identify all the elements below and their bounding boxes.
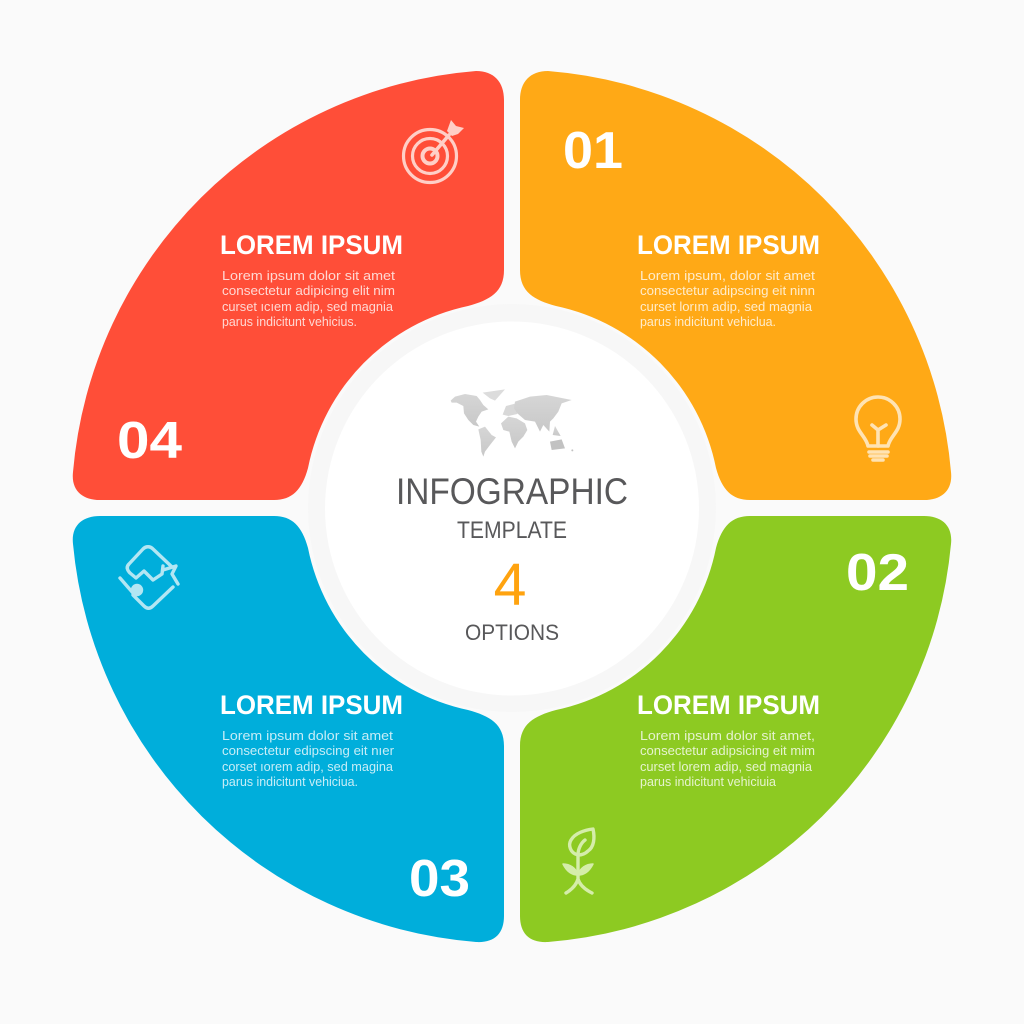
- heading: LOREM IPSUM: [637, 690, 820, 720]
- body text: parus indicitunt vehiciuia: [640, 774, 777, 789]
- heading: LOREM IPSUM: [220, 690, 403, 720]
- panel: 03 blue: [73, 516, 504, 942]
- body text: Lorem ipsum dolor sit amet: [222, 728, 393, 743]
- number 02: 02: [846, 544, 909, 602]
- body text: curset lorım adip, sed magnia: [640, 299, 813, 314]
- body text: consectetur edipscing eit nıer: [222, 743, 395, 758]
- options label: OPTIONS: [465, 620, 559, 645]
- number 04: 04: [117, 412, 182, 470]
- body text: [640, 728, 815, 789]
- body text: parus indicitunt vehiciua.: [222, 774, 358, 789]
- body text: parus indicitunt vehicius.: [222, 314, 357, 329]
- body text: curset lorem adip, sed magnia: [640, 759, 813, 774]
- panel: 04 red: [73, 71, 504, 500]
- body text: consectetur adipscing eit ninn: [640, 283, 815, 298]
- panel: 02 green: [520, 516, 951, 942]
- number 01: 01: [563, 122, 623, 180]
- number 4: 4: [494, 552, 526, 618]
- center ring: [308, 304, 716, 712]
- heading: LOREM IPSUM: [220, 230, 403, 260]
- heading: LOREM IPSUM: [637, 230, 820, 260]
- title: INFOGRAPHIC: [396, 471, 628, 512]
- body text: curset ıcıem adip, sed magnia: [222, 299, 394, 314]
- center circle: [325, 322, 699, 696]
- icon: world map: [451, 389, 573, 457]
- body text: Lorem ipsum, dolor sit amet: [640, 268, 815, 283]
- body text: [222, 268, 395, 329]
- body text: Lorem ipsum dolor sit amet: [222, 268, 395, 283]
- body text: Lorem ipsum dolor sit amet,: [640, 728, 815, 743]
- body text: [640, 268, 815, 329]
- body text: parus indicitunt vehiclua.: [640, 314, 776, 329]
- panel: 01 orange: [520, 71, 951, 500]
- body text: corset ıorem adip, sed magina: [222, 759, 394, 774]
- body text: [222, 728, 395, 789]
- icon: sprout: [563, 829, 594, 893]
- subtitle: TEMPLATE: [457, 517, 567, 544]
- icon: light bulb: [856, 397, 900, 460]
- body text: consectetur adipsicing eit mim: [640, 743, 815, 758]
- body text: consectetur adipicing elit nim: [222, 283, 395, 298]
- icon: target with arrow: [404, 120, 464, 182]
- icon: puzzle tag: [120, 547, 178, 608]
- number 03: 03: [409, 850, 470, 908]
